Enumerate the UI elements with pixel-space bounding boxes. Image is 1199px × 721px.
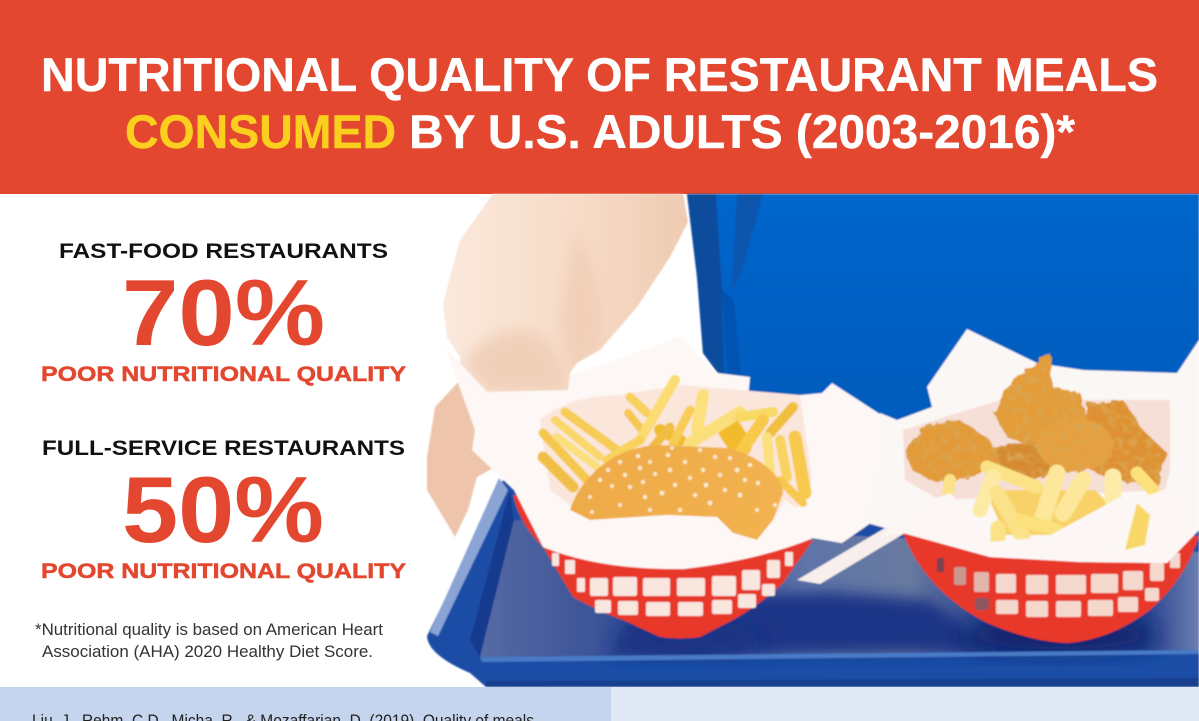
- title: NUTRITIONAL QUALITY OF RESTAURANT MEALS: [41, 48, 1158, 101]
- statistic: full-service restaurants: [41, 436, 406, 583]
- right basket paper liner: [797, 329, 1199, 584]
- header banner: [0, 0, 1199, 194]
- fried chicken: [905, 353, 1167, 487]
- citation panel: [0, 687, 611, 721]
- footnote: [35, 621, 383, 661]
- title: BY U.S. ADULTS (2003-2016)*: [409, 105, 1076, 158]
- tray: [427, 468, 1199, 687]
- french fries left: [543, 380, 805, 503]
- photo: server holding tray of fast food: [427, 194, 1199, 687]
- right basket: [903, 533, 1199, 643]
- lattice cells: [937, 553, 1180, 617]
- footnote: *Nutritional quality is based on American Heart: [35, 621, 383, 639]
- poor quality caption: POOR NUTRITIONAL QUALITY: [41, 362, 406, 386]
- poor quality caption: POOR NUTRITIONAL QUALITY: [41, 559, 406, 583]
- footnote: Association (AHA) 2020 Healthy Diet Score.: [42, 643, 373, 661]
- left basket paper liner: [445, 337, 892, 569]
- title: [41, 48, 1158, 158]
- french fries right: [948, 467, 1153, 543]
- arm and hand: [427, 194, 688, 537]
- 50 percent figure: 50%: [122, 457, 324, 562]
- paper fold over bun and fries: [538, 470, 1199, 569]
- statistic: fast-food restaurants: [41, 239, 406, 386]
- right footer panel: [611, 687, 1199, 721]
- left basket: [513, 495, 813, 638]
- full-service label: FULL-SERVICE RESTAURANTS: [42, 436, 405, 460]
- server shirt: [687, 194, 1199, 470]
- lattice cells: [552, 552, 793, 616]
- hamburger bun with sesame: [570, 445, 783, 540]
- title: CONSUMED: [125, 105, 396, 158]
- fast-food label: FAST-FOOD RESTAURANTS: [59, 239, 388, 263]
- 70 percent figure: 70%: [122, 260, 325, 365]
